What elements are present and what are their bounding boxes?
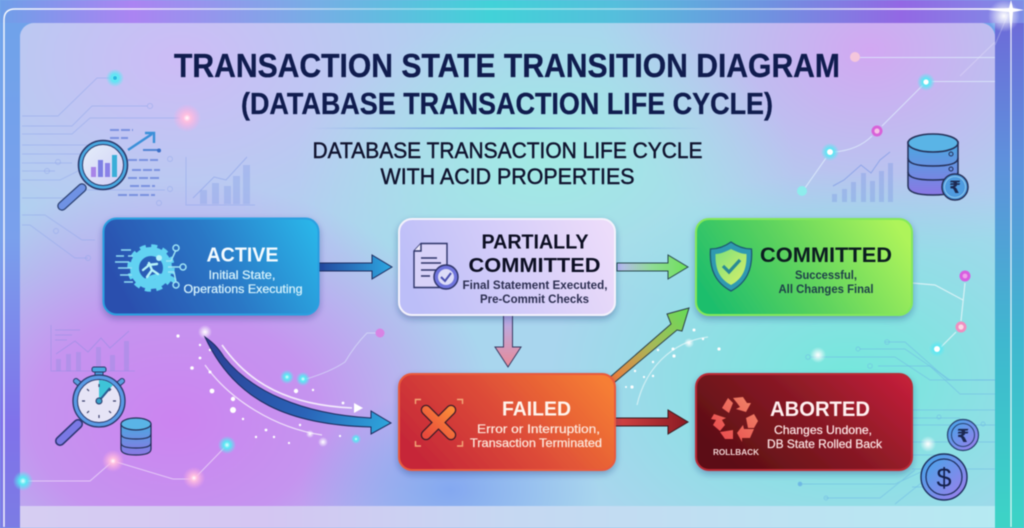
arrow: partially committed to committed <box>617 255 688 279</box>
glow dot: pink top left <box>173 104 201 132</box>
failed description: Transaction Terminated <box>470 436 602 450</box>
decorative network: right <box>912 283 965 347</box>
glow dots: right <box>929 270 970 357</box>
icon: x mark <box>416 400 462 446</box>
committed description: Successful, <box>795 268 857 282</box>
active description: Initial State, <box>208 268 276 282</box>
aborted description <box>767 423 883 451</box>
aborted description: Changes Undone, <box>774 423 872 437</box>
arrow: failed to aborted <box>615 410 688 434</box>
decorative network: lower right <box>798 340 995 504</box>
glow dot: near coins <box>920 436 936 452</box>
icon: rupee coin <box>948 420 978 450</box>
icon: recycle rollback <box>711 397 758 442</box>
icon: small database <box>121 418 151 455</box>
rollback caption: ROLLBACK <box>713 448 759 457</box>
arrow: partially committed to failed <box>495 315 521 367</box>
decorative network: top right <box>805 58 995 188</box>
arrow: failed to committed <box>609 308 689 382</box>
subtitle: WITH ACID PROPERTIES <box>380 164 634 189</box>
icon: database with rupee: ₹ <box>949 178 961 198</box>
circuit lines: top left <box>22 78 180 260</box>
failed label: FAILED <box>502 398 571 420</box>
partially committed description <box>462 278 608 306</box>
icon: dollar coin <box>921 454 967 500</box>
title <box>174 48 840 121</box>
partially committed label: PARTIALLY <box>482 230 589 254</box>
subtitle: DATABASE TRANSACTION LIFE CYCLE <box>312 138 702 163</box>
glow dots: lower left <box>13 436 236 491</box>
panel: committed state <box>696 219 912 315</box>
panel: aborted state <box>696 374 912 470</box>
committed label: COMMITTED <box>760 244 892 267</box>
title: (DATABASE TRANSACTION LIFE CYCLE) <box>241 86 773 121</box>
icon: magnifier with report <box>62 130 161 206</box>
pale line chart: lower left <box>51 325 135 371</box>
icon: dollar coin: $ <box>936 463 952 493</box>
icon: rupee coin: ₹ <box>957 426 969 447</box>
icon: database with rupee <box>908 134 968 200</box>
partially committed label <box>468 230 600 277</box>
sparkles near failed to committed arrow <box>625 328 721 405</box>
glow dots: top right <box>797 52 935 196</box>
subtitle <box>312 138 702 189</box>
aborted label: ABORTED <box>770 398 870 421</box>
title divider <box>310 128 705 129</box>
thin white sweep arc lower <box>205 365 322 435</box>
title: TRANSACTION STATE TRANSITION DIAGRAM <box>174 48 840 85</box>
sparkles around curved arrow <box>176 325 361 447</box>
panel: active state <box>104 218 318 314</box>
pale bar chart: top left <box>186 157 255 205</box>
partially committed description: Pre-Commit Checks <box>480 292 589 306</box>
thin white sweep arrow upper <box>222 345 363 413</box>
icon: shield <box>710 242 752 291</box>
icon: stopwatch with magnifier <box>60 367 125 441</box>
partially committed label: COMMITTED <box>468 254 600 277</box>
decorative network: lower left <box>23 445 227 481</box>
committed description <box>778 268 874 296</box>
panel: partially committed state <box>399 219 615 315</box>
active label: ACTIVE <box>206 244 278 266</box>
arrow: active to partially committed <box>319 255 392 279</box>
active description <box>184 268 302 296</box>
panel: bottom strip <box>20 506 995 528</box>
pale bar chart: top right <box>832 152 893 202</box>
star flare top right <box>960 0 1024 76</box>
aborted description: DB State Rolled Back <box>767 437 883 451</box>
failed description <box>470 422 602 450</box>
committed description: All Changes Final <box>778 282 874 296</box>
arrow: active to failed <box>205 337 391 434</box>
glow dot: cyan top left <box>106 69 124 87</box>
partially committed description: Final Statement Executed, <box>462 278 608 292</box>
icon: document with check <box>414 244 458 289</box>
icon: gear with runner <box>115 245 186 290</box>
decorative network with pink dot <box>280 328 384 386</box>
glow dot: circuit <box>810 347 826 363</box>
panel: failed state <box>399 374 615 470</box>
active description: Operations Executing <box>184 282 302 296</box>
failed description: Error or Interruption, <box>477 422 600 436</box>
